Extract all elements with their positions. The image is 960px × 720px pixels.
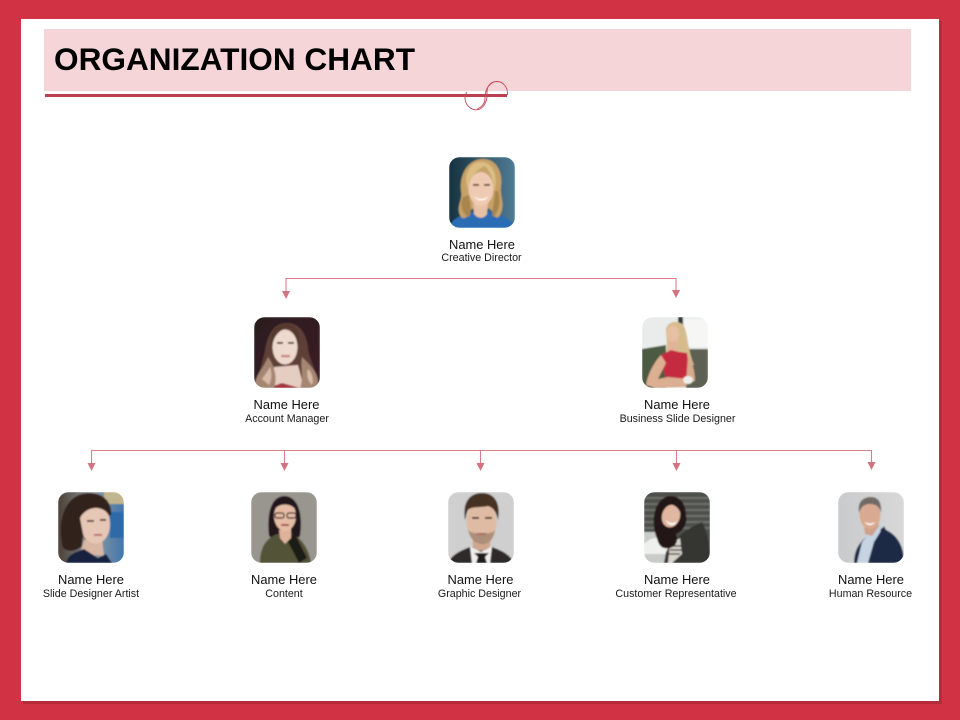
node: human resource [829, 492, 912, 600]
node: business slide designer [620, 317, 736, 425]
photo: human resource [838, 492, 904, 563]
role: Human Resource [829, 588, 912, 600]
role: Content [265, 588, 303, 600]
photo: account manager [254, 317, 320, 388]
role: Graphic Designer [438, 588, 522, 600]
arrow: customer representative [672, 463, 680, 471]
photo: graphic designer [448, 492, 514, 563]
node: account manager [245, 317, 329, 425]
name: Name Here [838, 572, 904, 587]
connector: director to managers [282, 278, 680, 299]
connector: managers to team [88, 450, 876, 471]
node: graphic designer [438, 492, 522, 600]
role: Creative Director [441, 252, 522, 264]
name: Name Here [251, 572, 317, 587]
arrow: account manager [282, 291, 290, 299]
role: Customer Representative [615, 588, 737, 600]
photo: slide designer artist [58, 492, 124, 563]
node: creative director [441, 157, 522, 264]
arrow: business slide designer [672, 290, 680, 298]
arrow: human resource [868, 462, 876, 470]
role: Business Slide Designer [620, 413, 736, 425]
name: Name Here [644, 397, 710, 412]
node: slide designer artist [43, 492, 139, 600]
role: Slide Designer Artist [43, 588, 139, 600]
arrow: graphic designer [476, 463, 484, 471]
photo: business slide designer [642, 317, 708, 388]
name: Name Here [644, 572, 710, 587]
title: ORGANIZATION CHART [54, 41, 415, 77]
name: Name Here [254, 397, 319, 412]
arrow: slide designer artist [88, 463, 96, 471]
name: Name Here [448, 572, 513, 587]
photo: customer representative [644, 492, 710, 563]
role: Account Manager [245, 413, 329, 425]
title underline with flourish [45, 82, 508, 110]
node: content [251, 492, 317, 600]
photo: creative director [449, 157, 515, 228]
photo: content [251, 492, 317, 563]
name: Name Here [449, 237, 515, 252]
name: Name Here [58, 572, 124, 587]
title banner [44, 29, 911, 91]
node: customer representative [615, 492, 737, 600]
arrow: content [280, 463, 288, 471]
